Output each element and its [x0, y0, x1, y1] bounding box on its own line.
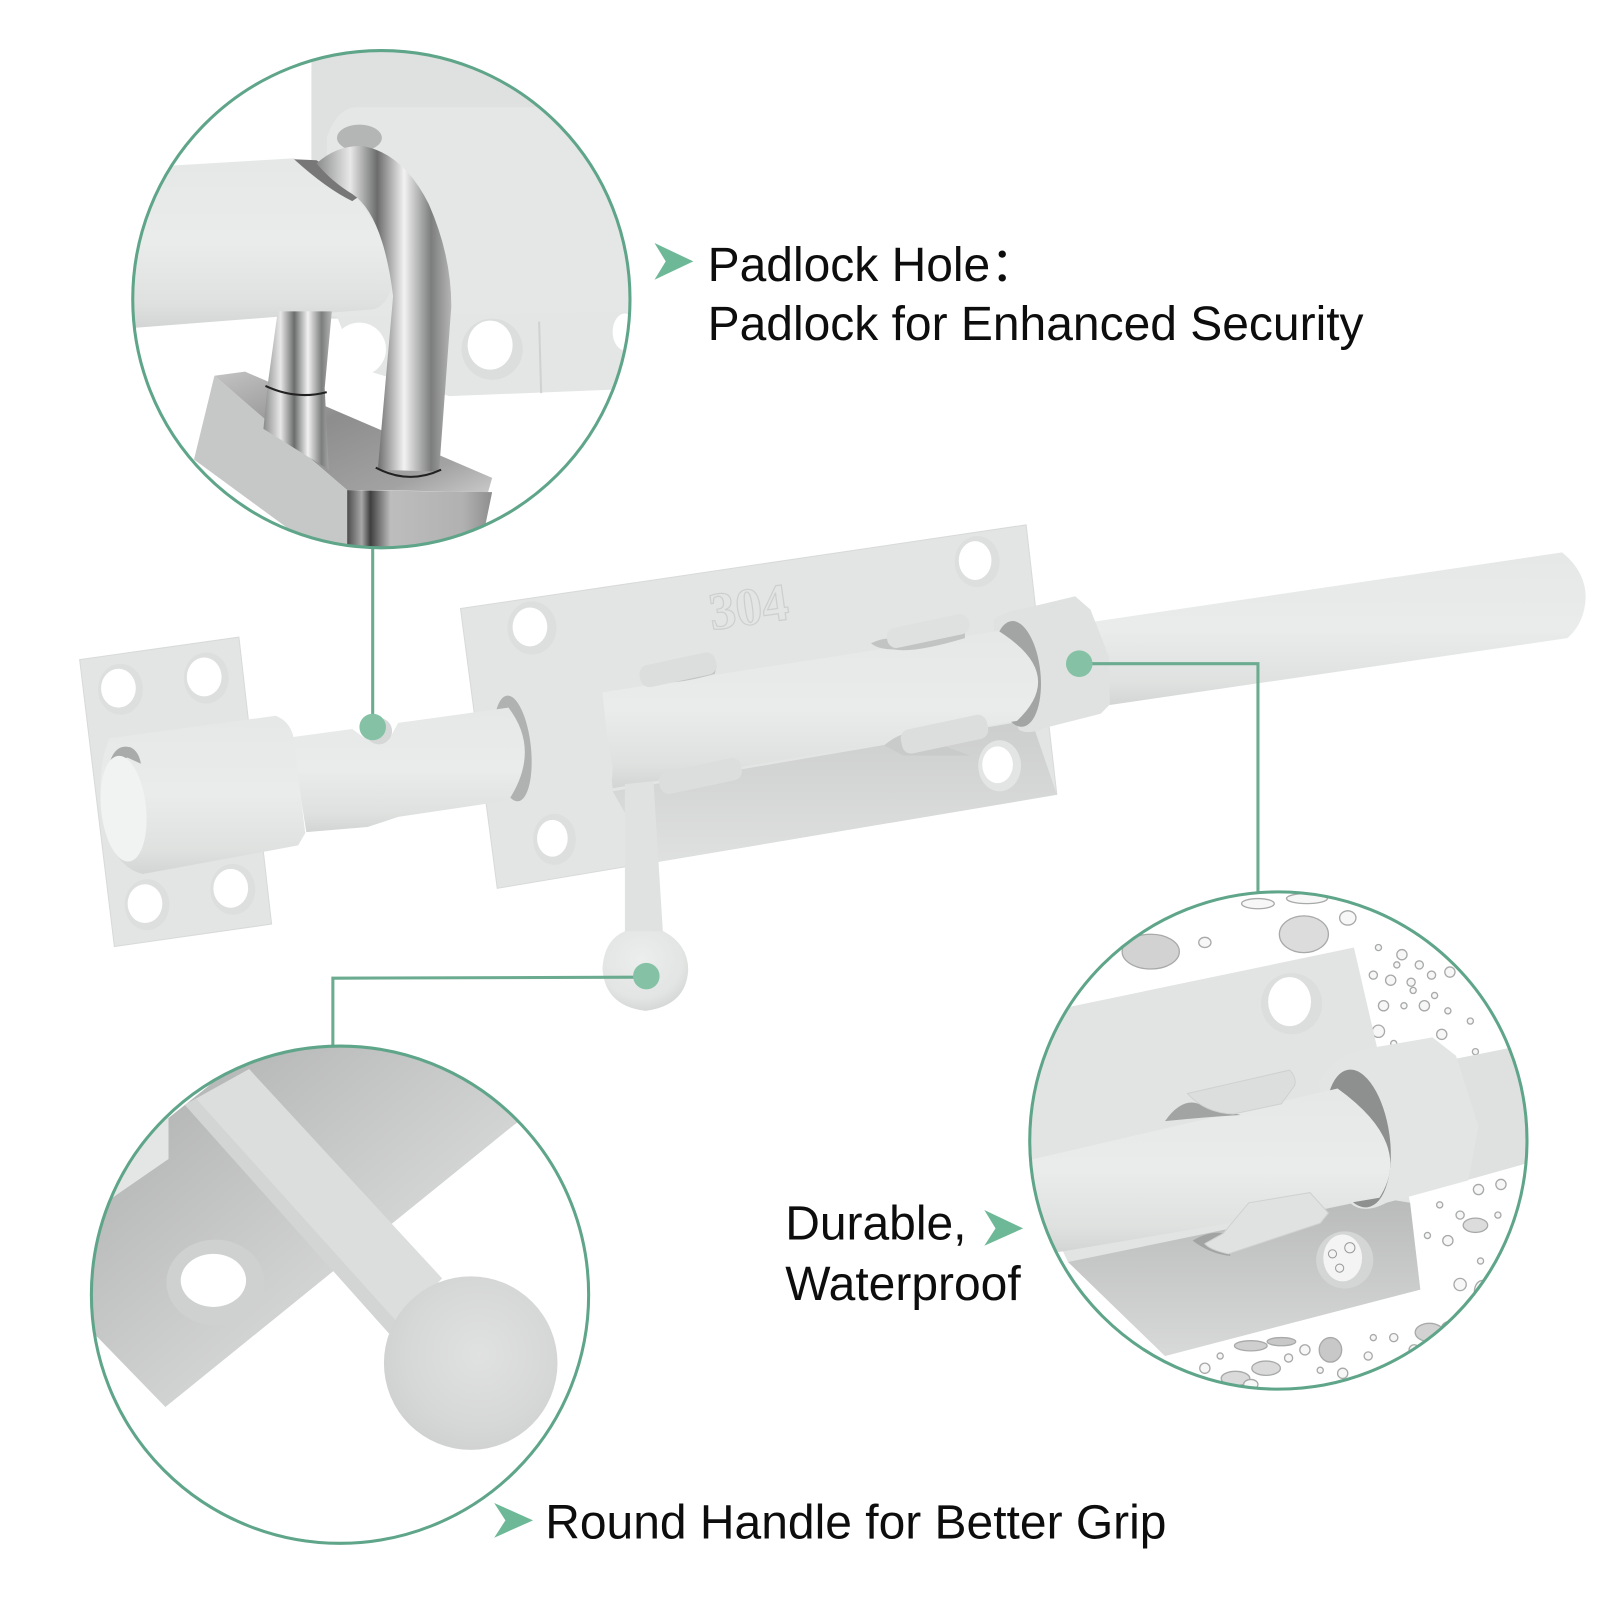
- product: barrel bolt latch: [80, 525, 1586, 1011]
- left sleeve: [489, 675, 613, 814]
- back plate: [312, 52, 537, 318]
- sleeve: [327, 107, 653, 317]
- notch hole: [113, 1117, 168, 1198]
- plate: [1031, 948, 1410, 1262]
- mounting holes: [1261, 973, 1373, 1289]
- end cap: [96, 716, 305, 874]
- ball: [384, 1276, 557, 1450]
- guide tabs: [637, 612, 990, 796]
- callout text: Padlock for Enhanced Security: [708, 298, 1364, 351]
- connector: round handle: [333, 963, 660, 1047]
- padlock body: [194, 372, 492, 546]
- mounting hole: [166, 1240, 246, 1307]
- arrow: [654, 243, 693, 280]
- rod right: [1457, 1048, 1526, 1180]
- connector: waterproof: [1066, 650, 1258, 893]
- arrow: [984, 1210, 1023, 1246]
- lower plate with holes: [338, 314, 628, 396]
- tabs: [1165, 1070, 1328, 1256]
- rod: [134, 158, 376, 328]
- handle stem: [185, 1069, 442, 1334]
- callout: durable waterproof: [785, 1198, 1023, 1311]
- strike plate: [80, 637, 272, 947]
- shackle ring: [265, 386, 327, 395]
- callout text: Padlock Hole：: [708, 239, 1038, 292]
- connector: padlock hole: [359, 547, 386, 740]
- shackle right leg: [317, 146, 451, 472]
- shackle left leg: [263, 311, 332, 470]
- barrel: [1021, 1088, 1390, 1252]
- arrow: [494, 1503, 533, 1538]
- panel: padlock detail circle: [131, 49, 632, 550]
- main mounting plate: [460, 525, 1057, 888]
- callout text: Round Handle for Better Grip: [545, 1497, 1167, 1550]
- right sleeve: [988, 596, 1110, 732]
- callout text: Durable,: [785, 1198, 967, 1251]
- long bolt rod end: [1093, 552, 1586, 707]
- callout: padlock hole: [654, 239, 1364, 351]
- callout: round handle: [494, 1497, 1167, 1550]
- engraved mark 304: 304: [705, 573, 792, 642]
- water droplets: [1122, 893, 1512, 1390]
- panel: waterproof detail circle: [1021, 892, 1532, 1390]
- panel: round handle detail circle: [87, 1031, 589, 1543]
- bolt barrel: [602, 631, 1038, 788]
- sleeve: [1351, 1038, 1468, 1209]
- plate: [87, 1031, 531, 1407]
- callout text: Waterproof: [785, 1258, 1021, 1311]
- bolt shaft with padlock notch: [291, 708, 525, 832]
- sliding handle: [602, 781, 688, 1011]
